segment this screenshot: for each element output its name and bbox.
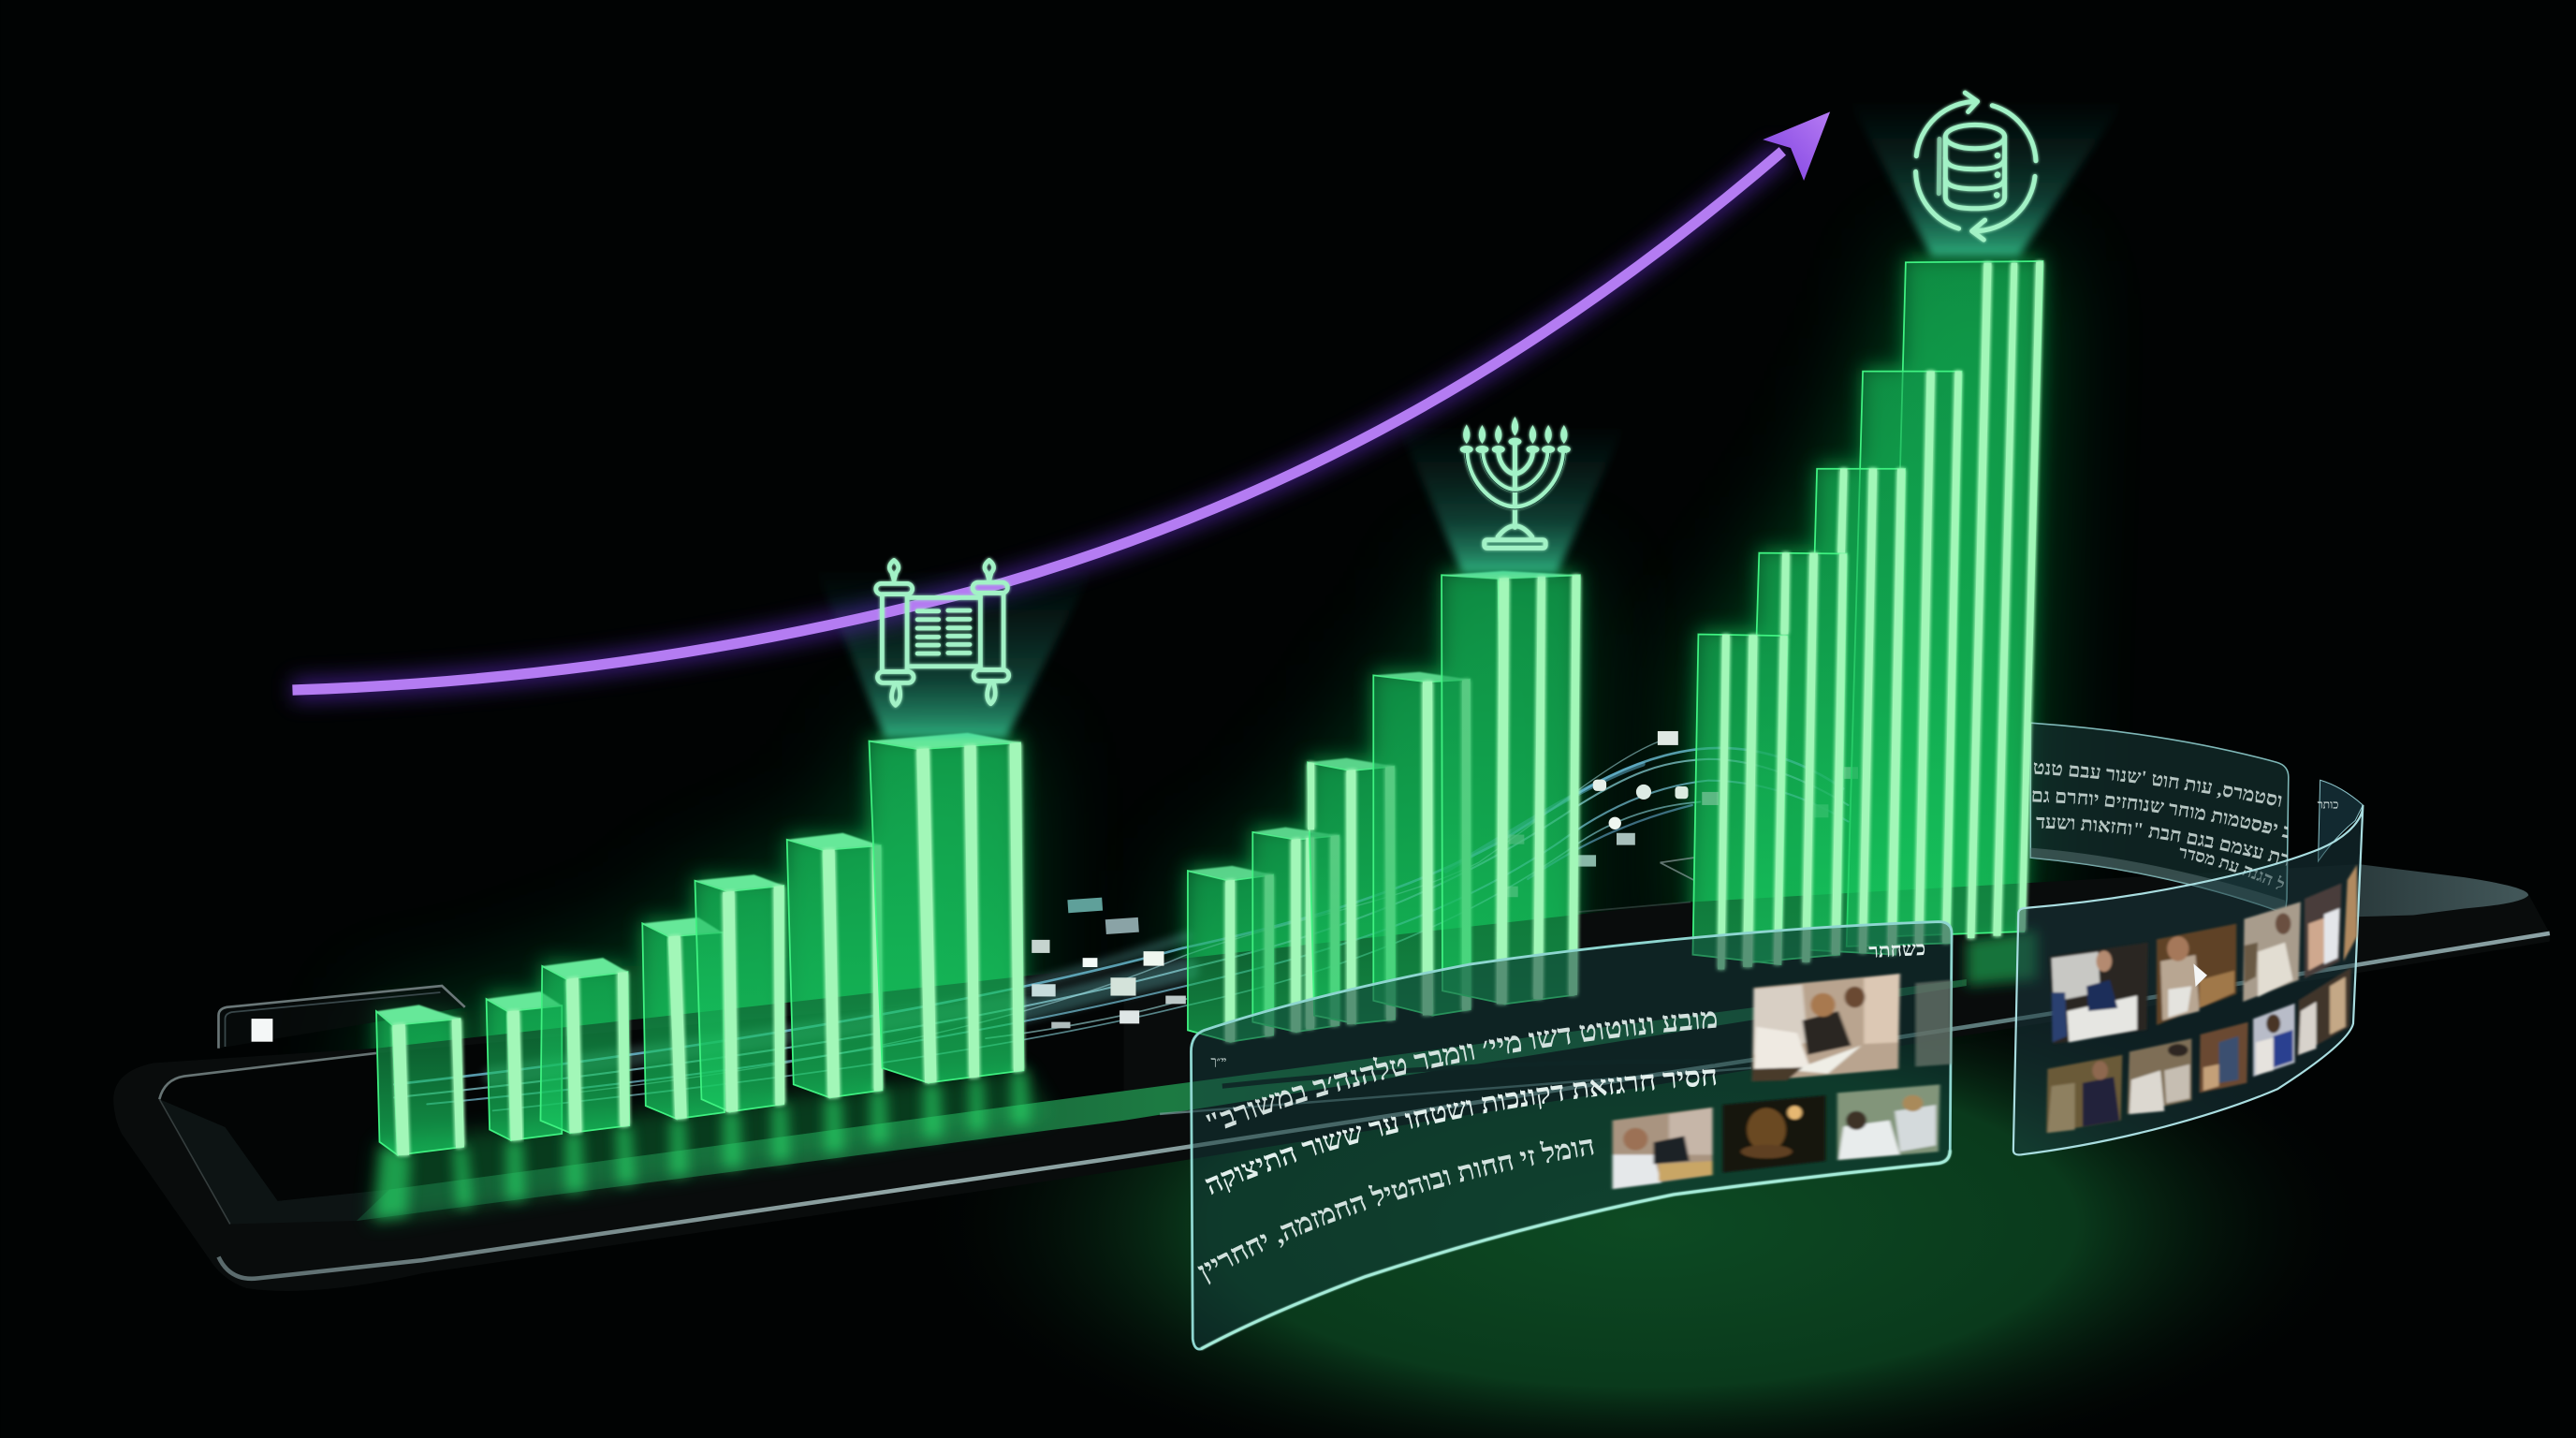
sliver of back side <box>2319 780 2363 861</box>
photo: study group <box>1752 974 1900 1081</box>
platform: tablet base <box>113 858 2550 1291</box>
group 3 bar 2 <box>1747 553 1847 962</box>
glass tag with white marker <box>218 986 465 1049</box>
group 2 bar 5 <box>1442 571 1580 1004</box>
photo: classroom <box>1613 1108 1713 1189</box>
thumbnails row 2 <box>2046 1055 2122 1133</box>
panel: right curved glass with video thumbnails <box>2013 780 2363 1155</box>
photo: outdoor group <box>1837 1084 1940 1160</box>
data particles <box>1032 731 1858 1028</box>
bar 1 <box>376 1005 464 1155</box>
back panel text: להדשב יפסטמות מוחר שנוחזים יוחרם גם צבצוג <box>2033 790 2288 839</box>
rim highlight <box>218 933 2550 1279</box>
photos on front panel <box>1613 974 1952 1189</box>
line 2 text: חסיר חרגזאת דקונכות ושטחו ער ששור התיצוקה <box>1206 1069 1717 1195</box>
group 3 bar 3 <box>1804 469 1905 955</box>
data streams <box>394 736 1848 1110</box>
back panel text: ל הגנה עת מסדר <box>2179 847 2284 889</box>
panel: front curved glass with text and photos <box>1190 920 1953 1352</box>
green halo behind bars <box>376 258 2042 1147</box>
bar 4 <box>642 917 724 1119</box>
bar chart: group 3 <box>1692 261 2042 969</box>
group 3 bar 1 <box>1692 634 1788 969</box>
icon beams <box>815 98 2126 738</box>
line 1 text: "מובע ונווטוט דשו מיי׳ וומבר טלהנה׳ב במשורב <box>1206 1011 1717 1129</box>
icon: menorah <box>1460 417 1571 548</box>
thumbnails row 1 <box>2050 943 2148 1044</box>
back panel text <box>2033 762 2288 889</box>
back wedge of the tablet <box>2354 864 2528 917</box>
photo: side sliver <box>1915 980 1952 1066</box>
panel heading: כשחתר <box>1868 937 1926 962</box>
bar 2 <box>487 991 562 1140</box>
play button <box>2193 963 2207 987</box>
group 2 bar 1 <box>1188 866 1273 1042</box>
photo: candle <box>1723 1095 1825 1172</box>
bar chart: group 1 <box>376 733 1023 1155</box>
back panel text: תוסטמרס, עות חוט 'שנור עבם טנטן <box>2033 762 2282 807</box>
group 2 bar 4 <box>1373 672 1471 1016</box>
back panel text: בוחרת עצמם בגם חבת "וחזאות ושעד טוב <box>2036 816 2288 866</box>
line 3 text: הומל זי חחות ובוהטיל החמזמה, יחחריין <box>1198 1138 1593 1284</box>
bar 6 <box>787 833 883 1097</box>
reflections of bars on the floor <box>370 1068 1051 1224</box>
bar 7 <box>869 733 1023 1083</box>
bar 3 <box>540 958 629 1133</box>
growth curve arrow <box>292 111 1830 690</box>
arrow head <box>1763 111 1830 181</box>
curved glass sheet <box>2013 805 2363 1155</box>
icon: torah scroll <box>876 560 1009 705</box>
bar 5 <box>695 874 784 1112</box>
icon: database with sync arrows <box>1916 93 2036 240</box>
side label: כותר <box>2318 798 2338 811</box>
group 2 bar 3 <box>1308 758 1395 1024</box>
panel: back curved glass text <box>2029 723 2290 911</box>
bar chart: group 2 <box>1188 571 1580 1042</box>
group 3 bar 4 <box>1847 372 1962 946</box>
group 3 bar 5 <box>1888 261 2042 938</box>
group 2 bar 2 <box>1252 828 1339 1032</box>
small mark: ײ״ך <box>1211 1054 1226 1067</box>
